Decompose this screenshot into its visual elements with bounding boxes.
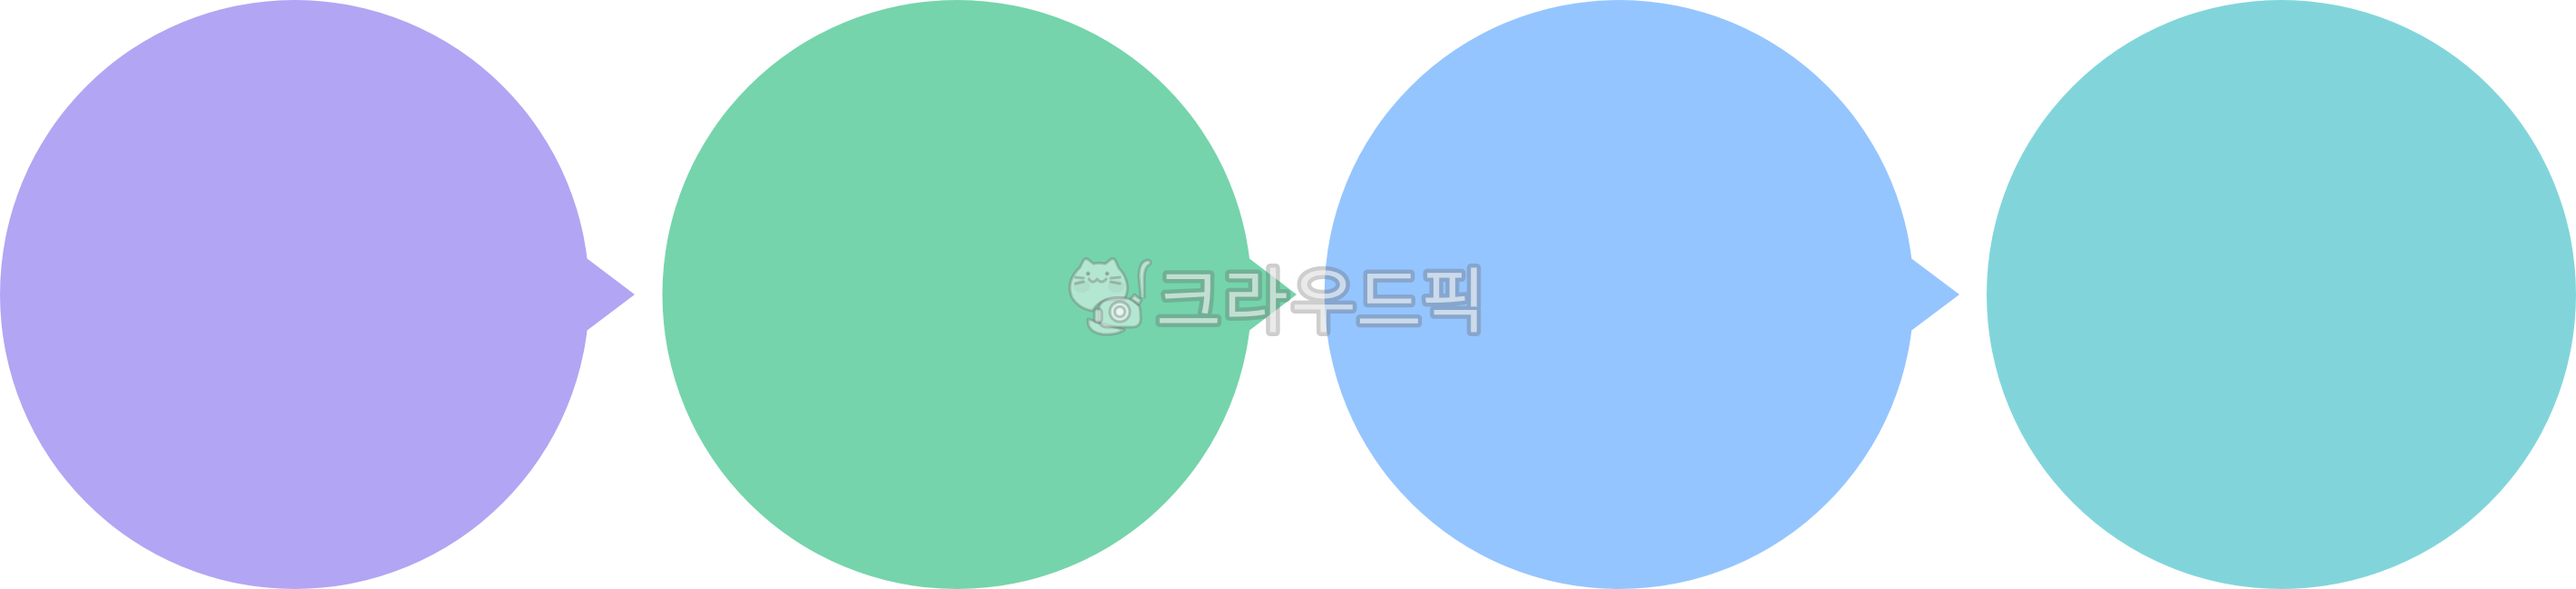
watermark text: 크라우드픽 (1156, 262, 1486, 342)
step 4: teal circle (1987, 0, 2576, 589)
icon: cat with camera (1070, 259, 1151, 334)
step 1: purple circle with arrow (0, 0, 635, 589)
watermark (1070, 259, 1486, 342)
step 2: green circle with arrow (662, 0, 1297, 589)
step 3: blue circle with arrow (1325, 0, 1959, 589)
